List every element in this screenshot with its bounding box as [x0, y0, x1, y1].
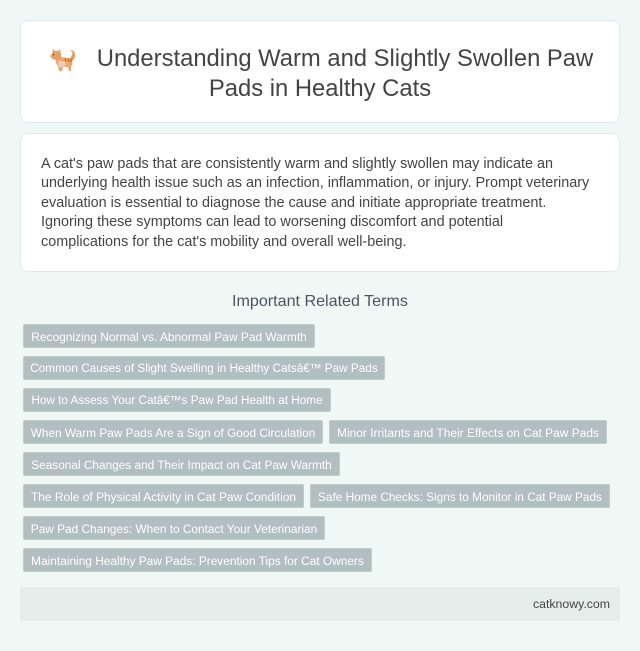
title: Pads in Healthy Cats [209, 74, 431, 102]
title [97, 45, 594, 102]
summary text: underlying health issue such as an infection, inflammation, or injury. Prompt veterinary [41, 175, 589, 191]
summary text: Ignoring these symptoms can lead to worsening discomfort and potential [41, 214, 503, 230]
tag: Recognizing Normal vs. Abnormal Paw Pad Warmth [31, 330, 307, 344]
footer bar [20, 587, 620, 621]
title: Understanding Warm and Slightly Swollen Paw [97, 45, 593, 72]
tag [23, 484, 304, 508]
tag: The Role of Physical Activity in Cat Paw Condition [31, 490, 296, 504]
tag [23, 516, 325, 540]
tag: Minor Irritants and Their Effects on Cat Paw Pads [337, 426, 599, 440]
related terms tags [23, 324, 610, 572]
header panel [20, 20, 620, 123]
tag [23, 548, 372, 572]
tag [23, 388, 331, 412]
tag: How to Assess Your Catâ€™s Paw Pad Health at Home [31, 394, 323, 407]
summary text: A cat's paw pads that are consistently warm and slightly swollen may indicate an [41, 156, 553, 172]
summary panel [20, 133, 620, 272]
tag [23, 356, 385, 380]
tag: Paw Pad Changes: When to Contact Your Veterinarian [31, 522, 317, 536]
tag: Seasonal Changes and Their Impact on Cat Paw Warmth [31, 458, 332, 472]
summary text [41, 156, 590, 250]
tag [23, 452, 340, 476]
summary text: complications for the cat's mobility and overall well-being. [41, 234, 406, 250]
summary text: evaluation is essential to diagnose the cause and initiate appropriate treatment. [41, 194, 546, 210]
icon: cat [50, 49, 75, 71]
tag [23, 324, 315, 348]
tag: Safe Home Checks: Signs to Monitor in Cat Paw Pads [318, 490, 602, 504]
tag: When Warm Paw Pads Are a Sign of Good Circulation [31, 426, 315, 440]
tag: Maintaining Healthy Paw Pads: Prevention Tips for Cat Owners [31, 554, 364, 568]
tag [23, 420, 323, 444]
tag: Common Causes of Slight Swelling in Healthy Catsâ€™ Paw Pads [30, 362, 378, 375]
section heading: Important Related Terms [232, 292, 408, 310]
tag [310, 484, 610, 508]
footer domain: catknowy.com [533, 597, 610, 611]
tag [329, 420, 607, 444]
